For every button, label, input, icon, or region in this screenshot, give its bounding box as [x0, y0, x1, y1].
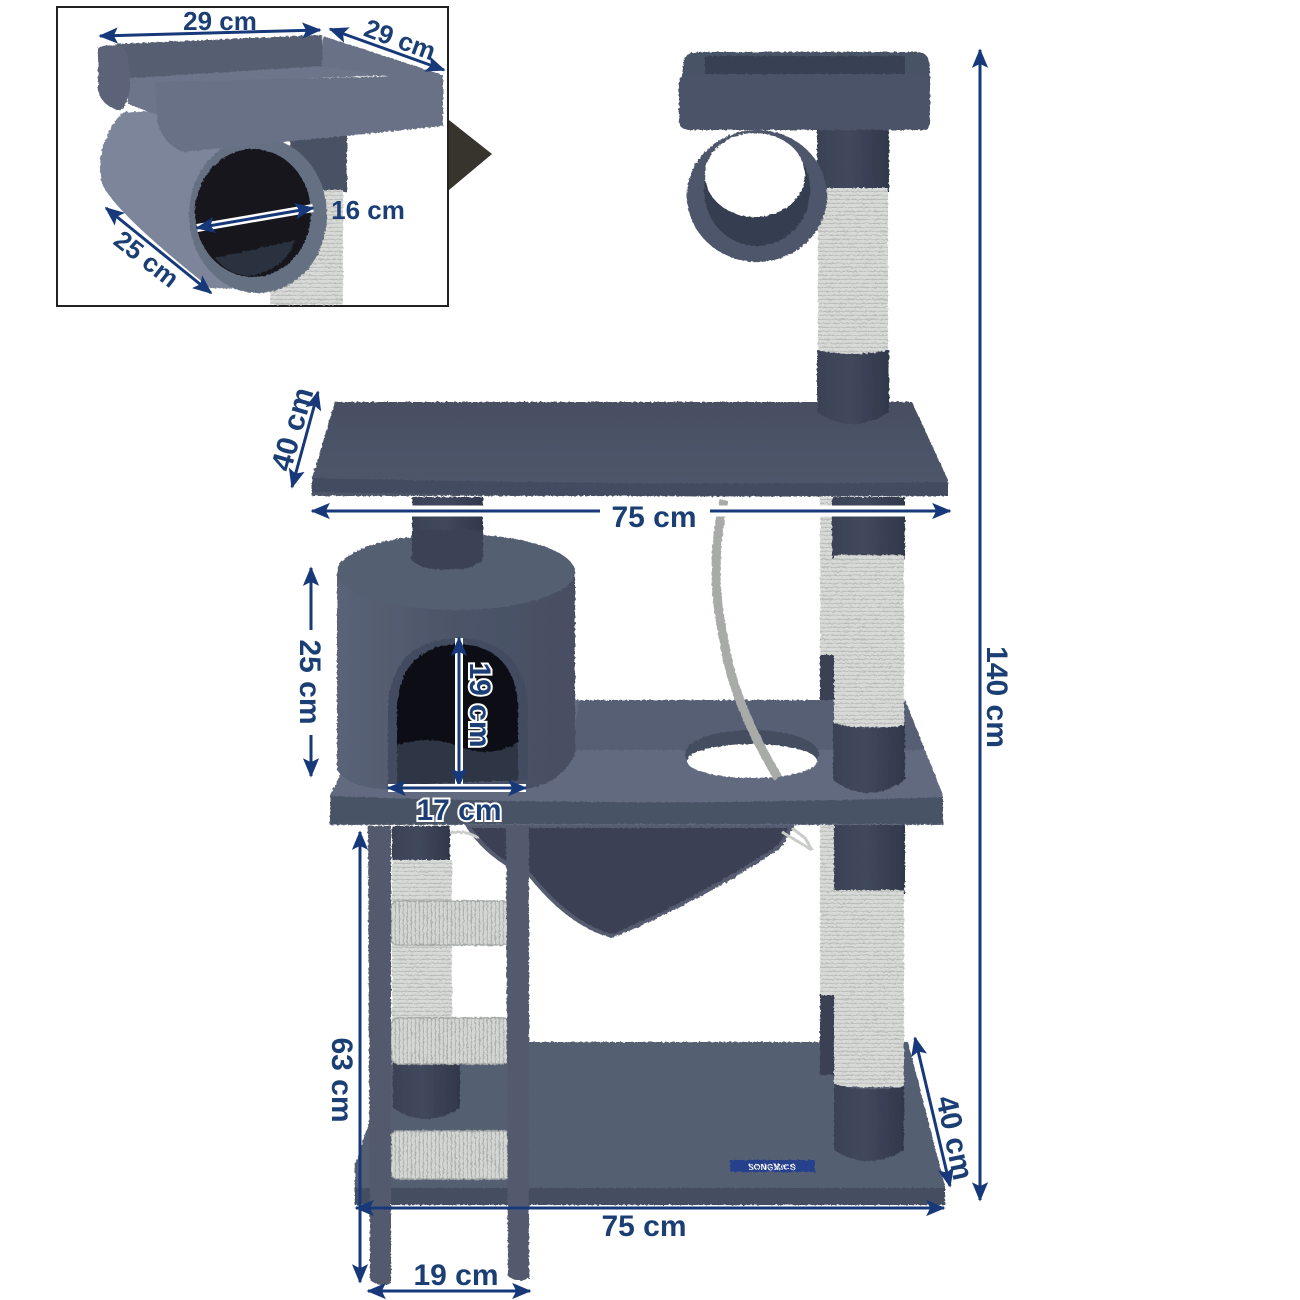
ladder rails	[368, 826, 529, 1285]
dimension: base width 75 cm: 75 cm	[601, 1210, 687, 1243]
back right upper post	[820, 497, 836, 725]
right lower post	[834, 822, 905, 1161]
short left post	[412, 497, 483, 572]
dimension: door height 19 cm: 19 cm	[463, 662, 496, 748]
cat house	[337, 530, 575, 790]
house interior floor	[397, 740, 518, 785]
sisal rope	[716, 500, 778, 778]
dimension: house height 25 cm: 25 cm	[293, 639, 326, 725]
dimension: tunnel length 25 cm: 25 cm	[108, 224, 185, 293]
dimension: house height 25 cm	[293, 568, 326, 776]
dimension: inset width 29 cm	[100, 6, 320, 36]
dimension: tunnel diameter 16 cm	[197, 195, 405, 228]
back right lower post	[820, 825, 836, 1075]
dimension: inset depth 29 cm: 29 cm	[360, 13, 440, 66]
house door	[388, 638, 528, 785]
top post	[817, 128, 889, 424]
lower left post	[392, 826, 460, 1119]
hammock	[468, 826, 792, 936]
dimension: base depth 40 cm	[915, 1038, 979, 1186]
dimension: upper width 75 cm	[312, 500, 950, 534]
dimension: tunnel length 25 cm	[106, 208, 211, 293]
dimension: door width 17 cm	[388, 788, 526, 827]
base board	[355, 1042, 945, 1205]
inset detail panel	[57, 7, 448, 306]
dimension: lower height 63 cm: 63 cm	[325, 1037, 358, 1123]
logo label	[730, 1160, 815, 1172]
inset perch	[98, 35, 443, 152]
dimension: tunnel diameter 16 cm: 16 cm	[331, 195, 405, 225]
dimension: base depth 40 cm: 40 cm	[929, 1093, 979, 1183]
rope ties	[437, 828, 812, 850]
top tunnel	[687, 130, 827, 262]
dimension: inset depth 29 cm	[330, 13, 444, 70]
inset tunnel	[100, 110, 327, 293]
dimension: height 140 cm: 140 cm	[980, 646, 1013, 748]
dimension: ladder width 19 cm: 19 cm	[413, 1259, 499, 1292]
top perch	[679, 52, 930, 130]
right middle post	[832, 497, 905, 793]
ladder rungs	[390, 901, 512, 1179]
inset post	[270, 130, 347, 305]
door opening	[397, 644, 518, 785]
platform hole	[685, 730, 819, 778]
upper platform	[312, 402, 948, 496]
dimension: door width 17 cm: 17 cm	[416, 794, 502, 827]
logo label: SONGMICS	[748, 1163, 796, 1172]
dimension: inset width 29 cm: 29 cm	[183, 6, 257, 36]
middle platform	[330, 700, 943, 825]
pointer triangle	[449, 120, 492, 190]
main cat tree	[312, 52, 948, 1285]
dimension: upper depth 40 cm: 40 cm	[265, 384, 320, 475]
dimension: upper width 75 cm: 75 cm	[611, 501, 697, 534]
